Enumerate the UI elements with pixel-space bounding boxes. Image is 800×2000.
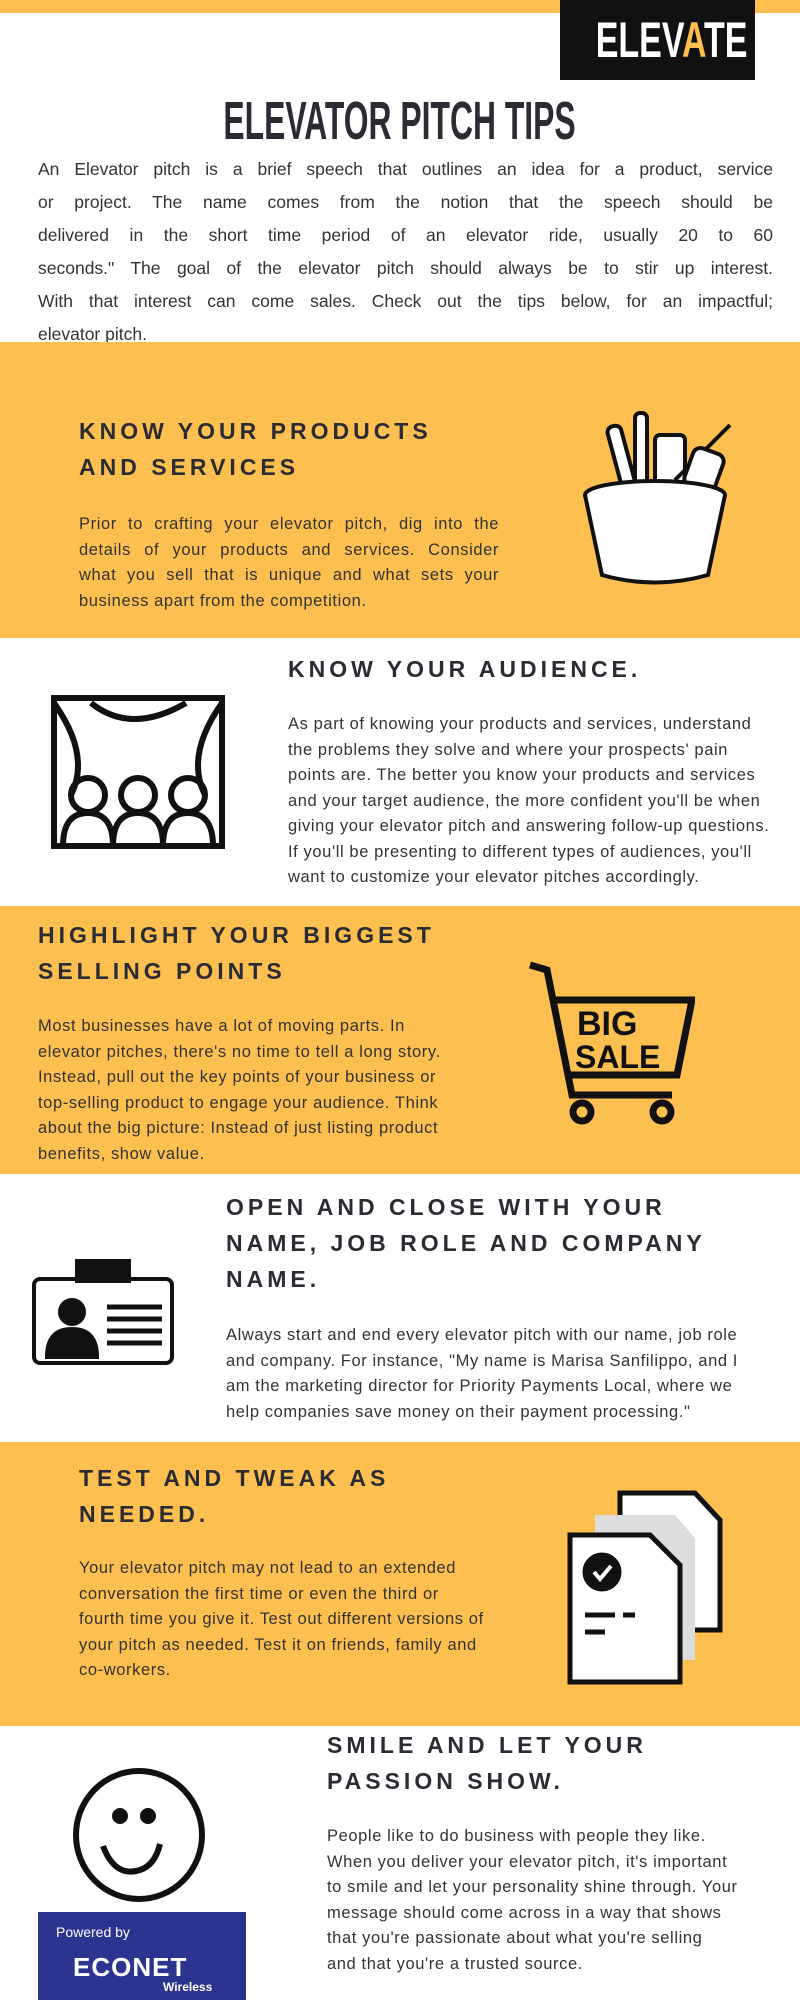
body text: benefits, show value.	[38, 1144, 205, 1162]
heading	[226, 1194, 706, 1292]
body text	[226, 1326, 738, 1420]
logo: Econet powered by	[38, 1912, 246, 2000]
panel: know your audience	[51, 656, 769, 886]
logo: Elevate: ELEVATE	[596, 12, 747, 68]
heading: AND SERVICES	[79, 454, 299, 480]
icon: shopping cart big sale: BIG	[577, 1005, 637, 1043]
body text: that you're passionate about what you're selling	[327, 1929, 702, 1947]
body text: and company. For instance, "My name is Marisa Sanfilippo, and I	[226, 1352, 738, 1370]
body text: Always start and end every elevator pitch with our name, job role	[226, 1326, 737, 1344]
top bar	[0, 0, 800, 13]
body text: your pitch as needed. Test it on friends, family and	[79, 1636, 477, 1654]
intro text: delivered in the short time period of an elevator ride, usually 20 to 60	[38, 225, 773, 245]
intro text	[38, 159, 773, 344]
body text: and that you're a trusted source.	[327, 1954, 583, 1972]
logo: Elevate	[560, 0, 755, 80]
heading: TEST AND TWEAK AS	[79, 1465, 389, 1491]
heading: SMILE AND LET YOUR	[327, 1732, 647, 1758]
intro text: An Elevator pitch is a brief speech that outlines an idea for a product, service	[38, 159, 773, 179]
icon: shopping cart big sale: SALE	[575, 1039, 660, 1075]
body text	[327, 1827, 738, 1972]
logo: Econet powered by: Powered by	[56, 1924, 130, 1940]
body text: top-selling product to engage your audience. Think	[38, 1094, 438, 1112]
body text: If you'll be presenting to different types of audiences, you'll	[288, 842, 752, 860]
icon: documents	[568, 1490, 722, 1684]
intro text: With that interest can come sales. Check out the tips below, for an impactful;	[38, 291, 773, 311]
body text: am the marketing director for Priority Payments Local, where we	[226, 1377, 732, 1395]
body text: points are. The better you know your products and services	[288, 766, 755, 784]
heading: OPEN AND CLOSE WITH YOUR	[226, 1194, 666, 1220]
logo: Econet powered by: ECONET	[73, 1952, 187, 1982]
body text: Most businesses have a lot of moving parts. In	[38, 1017, 405, 1035]
body text	[79, 515, 499, 610]
heading: SELLING POINTS	[38, 958, 286, 984]
icon: shopping cart big sale	[529, 962, 695, 1124]
body text: giving your elevator pitch and answering follow-up questions.	[288, 817, 769, 835]
heading: NAME.	[226, 1266, 320, 1292]
intro text: seconds." The goal of the elevator pitch should always be to stir up interest.	[38, 258, 773, 278]
body text: want to customize your elevator pitches accordingly.	[288, 868, 700, 886]
body text: the problems they solve and where your prospects' pain	[288, 740, 728, 758]
body text: co-workers.	[79, 1661, 171, 1679]
heading: NEEDED.	[79, 1501, 209, 1527]
icon: theater audience	[51, 695, 225, 849]
heading	[79, 418, 432, 480]
body text: As part of knowing your products and services, understand	[288, 715, 751, 733]
body text: conversation the first time or even the third or	[79, 1584, 439, 1602]
body text: help companies save money on their payment processing."	[226, 1402, 690, 1420]
title: ELEVATOR PITCH TIPS	[224, 91, 576, 151]
heading	[79, 1465, 389, 1527]
body text: People like to do business with people they like.	[327, 1827, 706, 1845]
body text: When you deliver your elevator pitch, it's important	[327, 1852, 727, 1870]
body text	[38, 1017, 441, 1162]
body text: fourth time you give it. Test out different versions of	[79, 1610, 484, 1628]
icon: ID card	[32, 1259, 174, 1365]
heading: PASSION SHOW.	[327, 1768, 564, 1794]
body text: to smile and let your personality shine through. Your	[327, 1878, 738, 1896]
heading: KNOW YOUR PRODUCTS	[79, 418, 432, 444]
panel: highlight selling points	[0, 906, 800, 1174]
logo: Econet powered by: Wireless	[163, 1980, 212, 1994]
heading: HIGHLIGHT YOUR BIGGEST	[38, 922, 435, 948]
body text: Your elevator pitch may not lead to an extended	[79, 1559, 456, 1577]
body text: about the big picture: Instead of just listing product	[38, 1119, 438, 1137]
body text: message should come across in a way that shows	[327, 1904, 721, 1922]
heading	[38, 922, 435, 984]
intro text: elevator pitch.	[38, 324, 147, 344]
panel: smile	[38, 1732, 738, 2000]
panel: open and close	[32, 1194, 738, 1420]
heading: NAME, JOB ROLE AND COMPANY	[226, 1230, 706, 1256]
body text: Instead, pull out the key points of your business or	[38, 1068, 436, 1086]
body text: what you sell that is unique and what sets your	[79, 566, 499, 584]
panel: know your products	[0, 342, 800, 638]
icon: smiley	[73, 1768, 205, 1902]
icon: bucket of tools	[583, 411, 732, 584]
body text	[79, 1559, 484, 1679]
body text: elevator pitches, there's no time to tell a long story.	[38, 1042, 441, 1060]
body text: Prior to crafting your elevator pitch, dig into the	[79, 515, 499, 533]
body text: and your target audience, the more confident you'll be when	[288, 792, 760, 810]
heading	[327, 1732, 647, 1794]
body text: details of your products and services. Consider	[79, 540, 499, 558]
panel: test and tweak	[0, 1442, 800, 1726]
intro text: or project. The name comes from the notion that the speech should be	[38, 192, 773, 212]
body text: business apart from the competition.	[79, 592, 367, 610]
heading: KNOW YOUR AUDIENCE.	[288, 656, 641, 682]
body text	[288, 715, 769, 886]
